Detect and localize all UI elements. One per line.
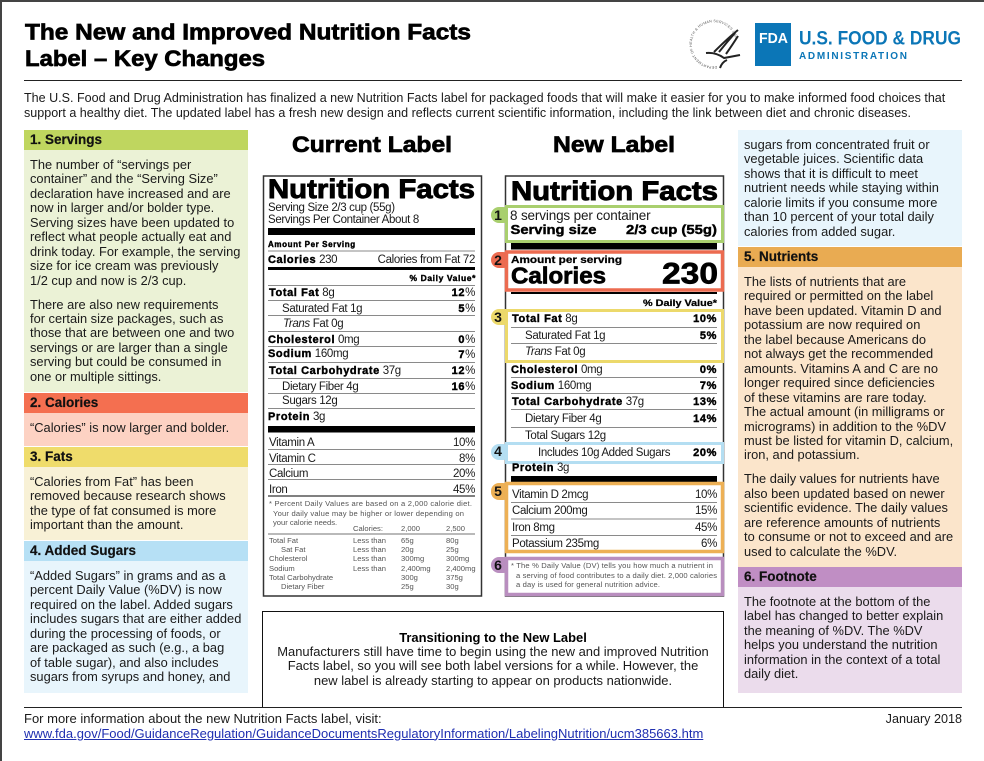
heading: Servings: 1. Servings <box>30 132 102 147</box>
text: Servings: those that are between one and two <box>30 325 234 340</box>
text: Nutrients: also been updated based on newer <box>744 486 945 501</box>
protein row: Protein 3g <box>512 462 569 474</box>
callout 3: fats <box>491 309 722 362</box>
panel: 1. Servings <box>24 130 248 392</box>
text: Nutrients: The actual amount (in milligrams or <box>744 404 945 419</box>
heading: Calories <box>24 393 248 413</box>
text: Servings: serving but could be consumed in <box>30 354 221 369</box>
footnote table: 2,400mg <box>401 564 431 573</box>
footnote table: Sodium <box>269 564 295 573</box>
footnote table: 300g <box>401 573 418 582</box>
nutrient rows: 12% <box>452 365 475 377</box>
vitamin rows: 45% <box>453 484 475 496</box>
text: Fats: removed because research shows <box>30 488 226 503</box>
label title: Nutrition Facts <box>511 176 718 206</box>
daily value heading: % Daily Value* <box>643 298 718 308</box>
callout 6: footnote: * The % Daily Value (DV) tells you how much a nutrient in <box>511 561 713 570</box>
serving information <box>268 202 419 226</box>
nutrient rows: 0% <box>458 334 475 346</box>
text: transitioning: Manufacturers still have time to begin using the new and improved Nutrition <box>277 644 709 659</box>
heading: Fats: 3. Fats <box>30 449 73 464</box>
text: Footnote: daily diet. <box>744 666 798 681</box>
text: Nutrients: The lists of nutrients that are <box>744 274 906 289</box>
heading: Current Label: Current Label <box>292 132 452 157</box>
callout 2: calories: Amount per serving <box>511 254 622 266</box>
footnote table: Total Fat <box>269 536 299 545</box>
nutrient rows: 0% <box>700 364 717 376</box>
nutrient rows: 7% <box>700 380 717 392</box>
callout 6: footnote <box>491 557 722 594</box>
callout 3: fats: Total Fat 8g <box>512 313 577 325</box>
nutrient rows: Total Sugars 12g <box>525 430 606 442</box>
text: Added Sugars: sugars from syrups and honey, and <box>30 669 230 684</box>
text: Footnote: helps you understand the nutrition <box>744 637 938 652</box>
footnote table: 2,400mg <box>446 564 476 573</box>
label title: Nutrition Facts <box>268 174 475 204</box>
callout 1: servings: Serving size <box>510 223 597 237</box>
nutrient rows: Sodium 160mg <box>511 380 591 392</box>
footnote table: 300mg <box>401 554 424 563</box>
callout 5: nutrients: Calcium 200mg <box>512 505 587 517</box>
text: transitioning: Facts label, so you will see both label versions for a while. However, the <box>288 658 698 673</box>
vitamin rows: 20% <box>453 468 475 480</box>
text: Footnote: The footnote at the bottom of the <box>744 594 930 609</box>
agency name: ADMINISTRATION <box>799 51 907 62</box>
footnote table: * Percent Daily Values are based on a 2,000 calorie diet. <box>269 499 472 508</box>
nutrient rows: Saturated Fat 1g <box>282 303 362 315</box>
text: Added Sugars: of table sugar), and also includes <box>30 655 218 670</box>
text: Nutrients <box>738 267 962 567</box>
callout 6: footnote: a day is used for general nutrition advice. <box>516 580 660 589</box>
text: Nutrients: iron, and potassium. <box>744 447 860 462</box>
footnote table: 2,500 <box>446 524 465 533</box>
calories section <box>268 240 476 283</box>
nutrient rows: Trans Fat 0g <box>283 318 343 330</box>
footnote table: 80g <box>446 536 459 545</box>
nutrient rows: Dietary Fiber 4g <box>525 413 601 425</box>
text: Calories: “Calories” is now larger and bolder. <box>30 420 229 435</box>
callout 2: calories <box>491 252 722 290</box>
text: Nutrients: to consume or not to exceed and are <box>744 529 953 544</box>
callout 3: fats: Trans Fat 0g <box>525 346 585 358</box>
vitamin rows: Vitamin C <box>269 453 316 465</box>
text: Fats: the type of fat consumed is more <box>30 503 216 518</box>
footer: more information: www.fda.gov/Food/GuidanceRegulation/GuidanceDocumentsRegulatoryInformation/LabelingNutrition/ucm385663.htm <box>24 726 703 740</box>
panel: 5. Nutrients <box>738 247 962 567</box>
heading: Added Sugars <box>24 541 248 561</box>
footnote table: Dietary Fiber <box>281 582 325 591</box>
text: Fats <box>24 467 248 540</box>
text: Nutrients: The daily values for nutrients have <box>744 471 940 486</box>
footnote table: Your daily value may be higher or lower depending on <box>273 509 464 518</box>
footnote table: 25g <box>446 545 459 554</box>
footnote table: Less than <box>353 545 386 554</box>
nutrient rows: Sugars 12g <box>282 395 337 407</box>
text: Nutrients: amounts. Vitamins A and C are no <box>744 361 938 376</box>
calories section: Calories 230 <box>268 254 337 266</box>
header rule <box>24 80 962 81</box>
calories section: Calories from Fat 72 <box>378 254 475 266</box>
nutrient rows: Total Carbohydrate 37g <box>512 396 644 408</box>
footnote table: Less than <box>353 564 386 573</box>
footer: date: January 2018 <box>886 712 962 726</box>
callout 5: nutrients: Potassium 235mg <box>512 538 599 550</box>
text: Servings: There are also new requirements <box>30 297 218 312</box>
text: Nutrients: must be listed for vitamin D, calcium, <box>744 433 953 448</box>
nutrient rows: 5% <box>458 303 475 315</box>
callout 2: calories: Calories <box>511 262 606 288</box>
panel: Added Sugars continued: calories from added sugar. <box>744 224 895 239</box>
vitamin rows: Calcium <box>269 468 308 480</box>
text: Nutrients: not always get the recommended <box>744 346 933 361</box>
nutrient rows: Protein 3g <box>268 411 325 423</box>
text: Servings: for certain size packages, such as <box>30 311 223 326</box>
panel: Added Sugars continued: sugars from concentrated fruit or <box>744 137 930 152</box>
text: Fats: important than the amount. <box>30 517 184 532</box>
footnote table: 25g <box>401 582 414 591</box>
text: Servings: reflect what people actually eat and <box>30 229 231 244</box>
footnote table: Total Carbohydrate <box>269 573 333 582</box>
panel: Added Sugars continued: vegetable juices. Scientific data <box>744 151 923 166</box>
footnote table: Cholesterol <box>269 554 308 563</box>
nutrient rows: Sodium 160mg <box>268 348 348 360</box>
footnote table: your calorie needs. <box>273 518 337 527</box>
calories section: Amount Per Serving <box>268 240 356 249</box>
agency name: U.S. FOOD & DRUG <box>799 28 961 50</box>
nutrient rows: Cholesterol 0mg <box>511 364 602 376</box>
heading: Servings <box>24 130 248 150</box>
vitamin rows <box>268 437 475 496</box>
nutrient rows: Total Fat 8g <box>269 287 334 299</box>
heading: Footnote: 6. Footnote <box>744 569 817 584</box>
panel: Added Sugars continued: than 10 percent of your total daily <box>744 209 934 224</box>
callout 3: fats: Saturated Fat 1g <box>525 330 605 342</box>
footnote table: 375g <box>446 573 463 582</box>
text: Added Sugars <box>24 561 248 693</box>
callout 1: servings: 1 <box>494 207 502 223</box>
heading: transitioning: Transitioning to the New Label <box>399 630 587 645</box>
nutrient rows: 16% <box>452 381 475 393</box>
callout 6: footnote: 6 <box>494 557 502 573</box>
text: Servings: declaration have increased and are <box>30 186 231 201</box>
heading: Nutrients: 5. Nutrients <box>744 249 818 264</box>
intro text <box>24 91 946 120</box>
serving information: Servings Per Container About 8 <box>268 214 419 226</box>
text: Added Sugars: during the processing of foods, or <box>30 626 221 641</box>
panel: transitioning to the new label <box>262 611 724 707</box>
text: Servings: 1/2 cup and now is 2/3 cup. <box>30 273 186 288</box>
text: Servings: one or multiple sittings. <box>30 369 161 384</box>
text: Nutrients: the label because Americans do <box>744 332 926 347</box>
text: Fats: “Calories from Fat” has been <box>30 474 193 489</box>
icon: FDA blue square <box>755 23 791 66</box>
text: Servings: Serving sizes have been updated to <box>30 215 234 230</box>
callout 1: servings: 8 servings per container <box>510 208 651 223</box>
footnote table: 2,000 <box>401 524 420 533</box>
text: Servings: servings or are larger than a single <box>30 340 228 355</box>
text: Added Sugars: are packaged as such (e.g., a bag <box>30 640 224 655</box>
intro text: support a healthy diet. The updated label has a fresh new design and reflects current scientific information, including the link between diet and chronic diseases. <box>24 106 911 120</box>
callout 5: nutrients <box>491 483 722 552</box>
text: Nutrients: are reference amounts of nutrients <box>744 515 940 530</box>
footer: more information: For more information about the new Nutrition Facts label, visit: <box>24 711 382 726</box>
text: Nutrients: micrograms) in addition to the %DV <box>744 419 946 434</box>
text: Nutrients: of these vitamins are rare today. <box>744 390 927 405</box>
panel: Added Sugars continued: nutrient needs while staying within <box>744 180 939 195</box>
heading: Nutrients <box>738 247 962 267</box>
logo: HHS seal and FDA wordmark <box>689 20 961 69</box>
callout 5: nutrients: 5 <box>494 483 502 499</box>
nutrient rows: Cholesterol 0mg <box>268 334 359 346</box>
panel: 2. Calories <box>24 393 248 446</box>
heading: Calories: 2. Calories <box>30 395 98 410</box>
calories section: % Daily Value* <box>409 273 476 283</box>
heading: Fats <box>24 447 248 467</box>
vitamin rows: 10% <box>453 437 475 449</box>
serving information: Serving Size 2/3 cup (55g) <box>268 202 395 214</box>
text: Calories <box>24 413 248 446</box>
vitamin rows: Vitamin A <box>269 437 315 449</box>
callout 3: fats: 5% <box>700 330 717 342</box>
footnote table: 300mg <box>446 554 469 563</box>
footnote table: 65g <box>401 536 414 545</box>
heading: New Label: New Label <box>553 132 675 157</box>
footnote table: Less than <box>353 554 386 563</box>
text: Servings: The number of “servings per <box>30 157 191 172</box>
title: Label – Key Changes <box>25 46 265 71</box>
callout 1: servings: 2/3 cup (55g) <box>626 223 717 237</box>
callout 1: servings <box>491 206 722 242</box>
panel: 4. Added Sugars <box>24 541 248 693</box>
text: Added Sugars: required on the label. Added sugars <box>30 597 233 612</box>
text: Footnote: information in the context of a total <box>744 652 940 667</box>
callout 5: nutrients: 6% <box>701 538 717 550</box>
panel: 3. Fats <box>24 447 248 540</box>
callout 2: calories: 2 <box>494 252 502 268</box>
footnote table: Less than <box>353 536 386 545</box>
text: Added Sugars: percent Daily Value (%DV) is now <box>30 582 222 597</box>
text: Servings <box>24 150 248 392</box>
intro text: The U.S. Food and Drug Administration has finalized a new Nutrition Facts label for packaged foods that will make it easier for you to make informed food choices that <box>24 91 945 105</box>
panel: new nutrition label <box>491 175 724 597</box>
heading: Added Sugars: 4. Added Sugars <box>30 543 136 558</box>
text: Servings: now in larger and/or bolder type. <box>30 200 214 215</box>
panel: current nutrition label <box>262 174 482 597</box>
text: Servings: size for ice cream was previously <box>30 258 218 273</box>
footnote table: 20g <box>401 545 414 554</box>
footnote table: 30g <box>446 582 459 591</box>
nutrient rows: 7% <box>458 349 475 361</box>
text: Added Sugars: includes sugars that are either added <box>30 611 241 626</box>
callout 5: nutrients: Vitamin D 2mcg <box>512 489 588 501</box>
icon: HHS seal: DEPARTMENT OF HEALTH & HUMAN SERVICES USA <box>689 20 736 69</box>
text: Nutrients: required or permitted on the label <box>744 288 933 303</box>
panel: Added Sugars continued: calorie limits if you consume more <box>744 195 937 210</box>
heading: Footnote <box>738 567 962 587</box>
nutrient rows <box>511 364 717 442</box>
panel: Added Sugars continued: shows that it is difficult to meet <box>744 166 918 181</box>
nutrient rows: Total Carbohydrate 37g <box>269 365 401 377</box>
icon: FDA blue square: FDA <box>759 31 789 47</box>
text: Nutrients: longer required since deficiencies <box>744 375 935 390</box>
text: Nutrients: used to calculate the %DV. <box>744 544 897 559</box>
text: Added Sugars: “Added Sugars” in grams and as a <box>30 568 226 583</box>
title: The New and Improved Nutrition Facts <box>25 20 471 44</box>
callout 3: fats: 10% <box>693 313 717 325</box>
callout 4: added sugars: 20% <box>693 447 717 459</box>
callout 4: added sugars: Includes 10g Added Sugars <box>538 447 671 459</box>
footnote table: Calories: <box>353 524 383 533</box>
callout 4: added sugars <box>491 443 722 462</box>
text: Nutrients: have been updated. Vitamin D and <box>744 303 942 318</box>
nutrient rows <box>268 286 475 423</box>
callout 5: nutrients: 15% <box>695 505 717 517</box>
nutrient rows: 13% <box>693 396 717 408</box>
footer: more information <box>24 711 704 740</box>
title <box>24 20 471 71</box>
callout 6: footnote: a serving of food contributes to a daily diet. 2,000 calories <box>516 571 717 580</box>
callout 5: nutrients: Iron 8mg <box>512 522 555 534</box>
text: Footnote: the meaning of %DV. The %DV <box>744 623 922 638</box>
text: Servings: container” and the “Serving Size” <box>30 171 218 186</box>
panel: 6. Footnote <box>738 567 962 693</box>
nutrient rows: 14% <box>693 413 717 425</box>
callout 5: nutrients: 10% <box>695 489 717 501</box>
panel: Added Sugars continued <box>738 130 962 246</box>
footnote table <box>268 499 476 591</box>
callout 2: calories: 230 <box>662 258 718 290</box>
text: transitioning <box>277 644 709 688</box>
text: transitioning: new label is already starting to appear on products nationwide. <box>314 673 672 688</box>
text: Nutrients: scientific evidence. The daily values <box>744 500 948 515</box>
vitamin rows: Iron <box>269 484 287 496</box>
text: Nutrients: potassium are now required on <box>744 317 920 332</box>
vitamin rows: 8% <box>459 453 475 465</box>
text: Servings: drink today. For example, the serving <box>30 244 240 259</box>
nutrient rows: Dietary Fiber 4g <box>282 381 358 393</box>
callout 3: fats: 3 <box>494 309 502 325</box>
callout 5: nutrients: 45% <box>695 522 717 534</box>
text: Footnote: label has changed to better explain <box>744 608 943 623</box>
text: Footnote <box>738 587 962 693</box>
nutrient rows: 12% <box>452 287 475 299</box>
footnote table: Sat Fat <box>281 545 306 554</box>
agency name <box>799 28 961 62</box>
footer rule <box>24 707 962 708</box>
callout 4: added sugars: 4 <box>494 443 502 459</box>
